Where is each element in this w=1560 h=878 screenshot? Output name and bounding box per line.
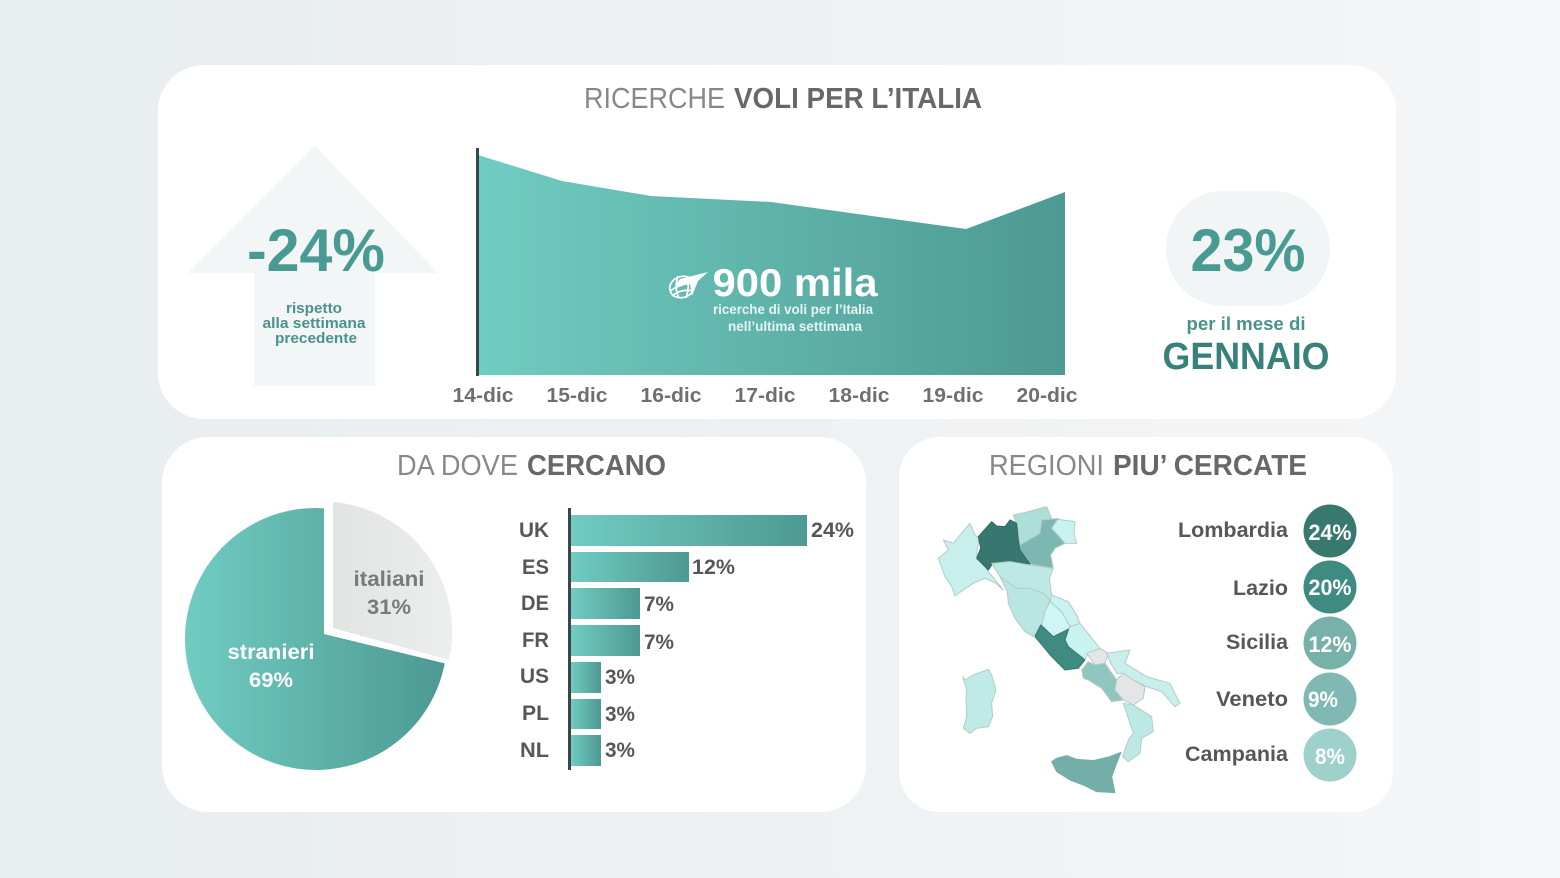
heading: regioni più cercate [989, 450, 1307, 482]
panel: ricerche voli [158, 65, 1396, 419]
ranking: veneto: Veneto [1216, 687, 1288, 711]
heading: ricerche voli per l'italia: VOLI PER L’ITALIA [734, 83, 982, 115]
x axis labels: 15-dic [546, 384, 608, 407]
ranking: sicilia [1226, 616, 1356, 670]
heading: regioni più cercate: REGIONI [989, 450, 1104, 482]
x axis labels: 17-dic [734, 384, 796, 407]
ranking: lombardia: Lombardia [1178, 518, 1289, 542]
callout: -24% arrow: -24% [247, 217, 385, 284]
x axis labels: 18-dic [828, 384, 890, 407]
percent labels: 3% [605, 702, 635, 726]
heading: da dove cercano [397, 450, 666, 482]
ranking: lombardia: 24% [1308, 520, 1352, 545]
heading: regioni più cercate: PIU’ CERCATE [1113, 450, 1307, 482]
icon: globe and plane [667, 272, 708, 301]
heading: da dove cercano: CERCANO [527, 450, 666, 482]
pie chart: stranieri italiani: 69% [249, 668, 293, 692]
country labels: FR [522, 628, 549, 652]
ranking: campania: Campania [1185, 742, 1289, 766]
callout: -24% arrow: rispetto [286, 300, 342, 317]
pie chart: stranieri italiani: stranieri [228, 640, 314, 664]
callout: 900 mila: 900 mila [712, 262, 878, 305]
percent labels: 12% [692, 555, 735, 579]
percent labels: 24% [811, 518, 854, 542]
percent labels: 7% [644, 592, 674, 616]
ranking: campania [1185, 728, 1356, 782]
percent labels: 3% [605, 665, 635, 689]
pie chart: stranieri italiani: italiani [354, 567, 424, 591]
country labels: DE [521, 591, 549, 615]
ranking: veneto [1216, 672, 1356, 726]
country labels: ES [522, 555, 549, 579]
pie chart: stranieri italiani: 31% [367, 595, 411, 619]
callout: 900 mila: ricerche di voli per l’Italia [713, 302, 873, 317]
ranking: lazio: Lazio [1233, 576, 1288, 600]
panel: da dove cercano [162, 437, 866, 812]
ranking: sicilia: Sicilia [1226, 630, 1289, 654]
percent labels: 7% [644, 630, 674, 654]
ranking: campania: 8% [1315, 744, 1345, 769]
ranking: sicilia: 12% [1308, 632, 1352, 657]
bar chart: paesi [519, 508, 854, 770]
country labels: US [520, 664, 549, 688]
heading: ricerche voli per l'italia: RICERCHE [584, 83, 725, 115]
area chart: ricerche per giorno [452, 148, 1078, 407]
ranking: lazio [1233, 560, 1356, 614]
x axis labels: 16-dic [640, 384, 702, 407]
callout: 23% gennaio: per il mese di [1186, 314, 1306, 334]
heading: ricerche voli per l'italia [584, 83, 982, 115]
country labels: UK [519, 518, 549, 542]
ranking: lombardia [1178, 504, 1356, 558]
ranking: lazio: 20% [1308, 575, 1352, 600]
callout: -24% arrow [188, 146, 438, 386]
callout: -24% arrow: precedente [275, 330, 357, 347]
x axis labels [452, 384, 1078, 407]
callout: 23% gennaio: GENNAIO [1162, 336, 1330, 378]
callout: 900 mila: nell’ultima settimana [728, 319, 862, 334]
pie chart: stranieri italiani [185, 502, 452, 770]
panel: regioni più cercate [899, 437, 1393, 812]
percent labels [605, 518, 854, 762]
callout: 900 mila [712, 262, 878, 334]
x axis labels: 19-dic [922, 384, 984, 407]
country labels: PL [522, 701, 549, 725]
percent labels: 3% [605, 738, 635, 762]
map: italia [938, 507, 1180, 793]
x axis labels: 20-dic [1016, 384, 1078, 407]
x axis labels: 14-dic [452, 384, 514, 407]
callout: -24% arrow: alla settimana [262, 315, 366, 332]
callout: 23% gennaio [1162, 191, 1330, 378]
ranking: veneto: 9% [1308, 687, 1338, 712]
country labels: NL [520, 738, 549, 762]
callout: 23% gennaio: 23% [1190, 217, 1306, 284]
heading: da dove cercano: DA DOVE [397, 450, 518, 482]
country labels [519, 518, 549, 762]
